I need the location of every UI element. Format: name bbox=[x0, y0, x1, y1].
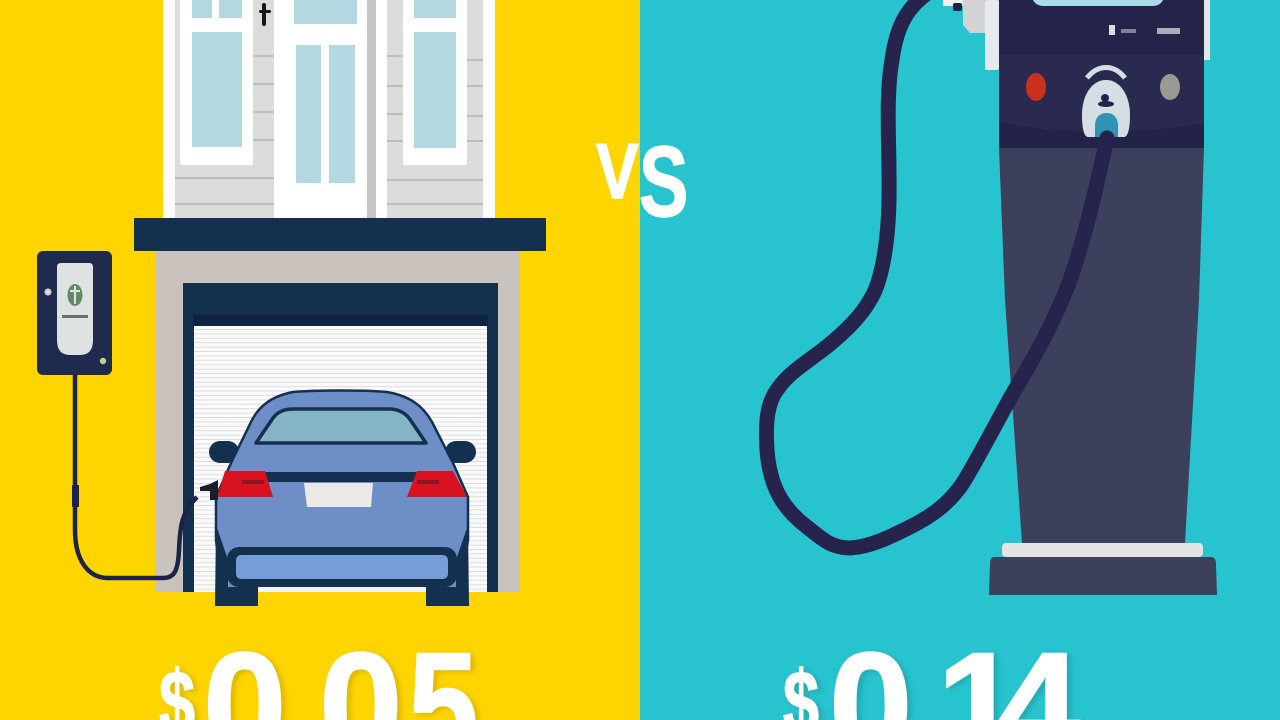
right lower corner and wheel bbox=[426, 525, 469, 606]
charger indicator light top bbox=[44, 288, 52, 296]
blue connector bbox=[1095, 113, 1118, 137]
holster icon top bbox=[1101, 94, 1109, 102]
panel: public charging background bbox=[640, 0, 1280, 720]
right tail light bbox=[407, 471, 467, 497]
grey button bbox=[1160, 74, 1180, 100]
red button bbox=[1026, 73, 1046, 101]
heading: versus: V bbox=[596, 128, 639, 215]
left lower corner and wheel bbox=[215, 525, 258, 606]
upper head bbox=[999, 0, 1204, 148]
door: centre bbox=[274, 0, 387, 218]
charger indicator light bottom bbox=[100, 358, 106, 364]
left tail light bbox=[217, 471, 273, 497]
garage wall bbox=[155, 251, 520, 592]
number plate bbox=[304, 483, 373, 507]
small labels bbox=[1109, 25, 1180, 35]
illustration: charging cable bbox=[766, 0, 1107, 548]
left mirror bbox=[209, 441, 239, 463]
garage door frame bbox=[183, 283, 498, 592]
charger label line bbox=[62, 315, 88, 318]
illustration: public charging station bbox=[943, 0, 1217, 595]
window: left bbox=[180, 0, 253, 165]
holster bbox=[1082, 80, 1130, 137]
holster arc bbox=[1087, 68, 1125, 78]
illustration: wall charger bbox=[37, 251, 112, 375]
price: home charging bbox=[159, 621, 478, 720]
head top band bbox=[999, 0, 1204, 55]
garage roof bar bbox=[134, 218, 546, 251]
heading: versus bbox=[596, 125, 688, 238]
heading: versus: S bbox=[639, 125, 688, 238]
car body bbox=[216, 390, 468, 590]
head bottom shade bbox=[999, 122, 1204, 148]
window: right bbox=[403, 0, 467, 165]
white base bbox=[1002, 543, 1203, 557]
rear window bbox=[256, 409, 426, 443]
panel: home charging background bbox=[0, 0, 640, 720]
right mirror bbox=[445, 441, 476, 463]
holster icon bbox=[1098, 101, 1114, 107]
trunk strip bbox=[265, 472, 417, 482]
screen bbox=[1033, 0, 1163, 6]
illustration: house upper floor bbox=[163, 0, 495, 218]
icon: door handle bbox=[259, 3, 271, 26]
garage roller door bbox=[194, 326, 487, 592]
illustration: blue car rear view bbox=[209, 390, 476, 606]
lower column bbox=[999, 148, 1204, 543]
price: public charging bbox=[783, 621, 1080, 720]
illustration: wall charger cable and plug bbox=[72, 374, 218, 578]
bumper bbox=[227, 547, 457, 587]
dark base bbox=[989, 557, 1217, 595]
under-car white gap bbox=[258, 587, 426, 592]
garage door shadow band bbox=[193, 315, 488, 327]
charger status icon bbox=[68, 284, 82, 306]
bracket bbox=[943, 0, 1210, 70]
illustration: garage bbox=[134, 218, 546, 592]
charger panel bbox=[57, 263, 93, 355]
